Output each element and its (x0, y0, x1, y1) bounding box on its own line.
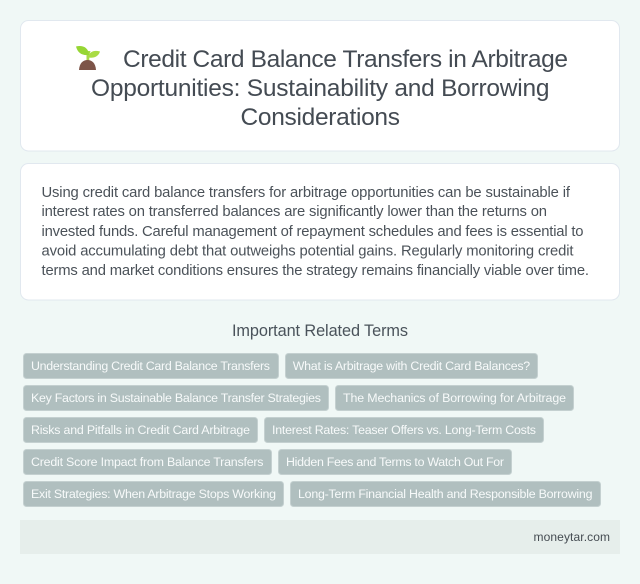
tag: understanding balance transfers: Understanding Credit Card Balance Transfers (31, 359, 270, 373)
tag: understanding balance transfers (24, 354, 278, 378)
footer (20, 520, 620, 554)
tag: long-term financial health (290, 482, 600, 506)
text block: summary paragraph: avoid accumulating debt that outweighs potential gains. Regularly monitoring credit (42, 244, 574, 260)
title: Credit Card Balance Transfers in Arbitrage (123, 46, 568, 73)
text block: summary paragraph: terms and market conditions ensures the strategy remains financially viable over time. (42, 263, 589, 279)
tag: exit strategies (24, 482, 284, 506)
panel: title card (20, 20, 620, 151)
text block: summary paragraph (42, 185, 589, 279)
text block: summary paragraph: invested funds. Careful management of repayment schedules and fees is essential to (42, 224, 584, 240)
heading: important related terms: Important Related Terms (232, 322, 408, 340)
tag: interest rates: Interest Rates: Teaser Offers vs. Long-Term Costs (272, 423, 536, 437)
tag: hidden fees (278, 450, 512, 474)
tag: exit strategies: Exit Strategies: When Arbitrage Stops Working (31, 487, 276, 501)
icon: seedling (76, 46, 100, 70)
footer source label: moneytar.com (534, 530, 610, 544)
tag: credit score impact (24, 450, 272, 474)
tag: risks and pitfalls (24, 418, 258, 442)
title (91, 46, 568, 131)
title: Considerations (240, 104, 400, 131)
panel: summary card (20, 164, 620, 300)
text block: summary paragraph: interest rates on transferred balances are significantly lower than the returns on (42, 204, 547, 220)
tag: long-term financial health: Long-Term Financial Health and Responsible Borrowing (298, 487, 593, 501)
tag: interest rates (264, 418, 544, 442)
tag: mechanics of borrowing (336, 386, 574, 410)
tag: key factors: Key Factors in Sustainable Balance Transfer Strategies (31, 391, 321, 405)
tag: credit score impact: Credit Score Impact from Balance Transfers (31, 455, 264, 469)
text block: summary paragraph: Using credit card balance transfers for arbitrage opportunities can be sustainable if (42, 185, 571, 201)
tag: what is arbitrage (286, 354, 538, 378)
tag: key factors (24, 386, 328, 410)
tag: what is arbitrage: What is Arbitrage with Credit Card Balances? (293, 359, 530, 373)
tag: mechanics of borrowing: The Mechanics of Borrowing for Arbitrage (343, 391, 566, 405)
tag: risks and pitfalls: Risks and Pitfalls in Credit Card Arbitrage (31, 423, 250, 437)
title: Opportunities: Sustainability and Borrowing (91, 75, 550, 102)
tag: hidden fees: Hidden Fees and Terms to Watch Out For (286, 455, 504, 469)
tag list (24, 354, 600, 506)
